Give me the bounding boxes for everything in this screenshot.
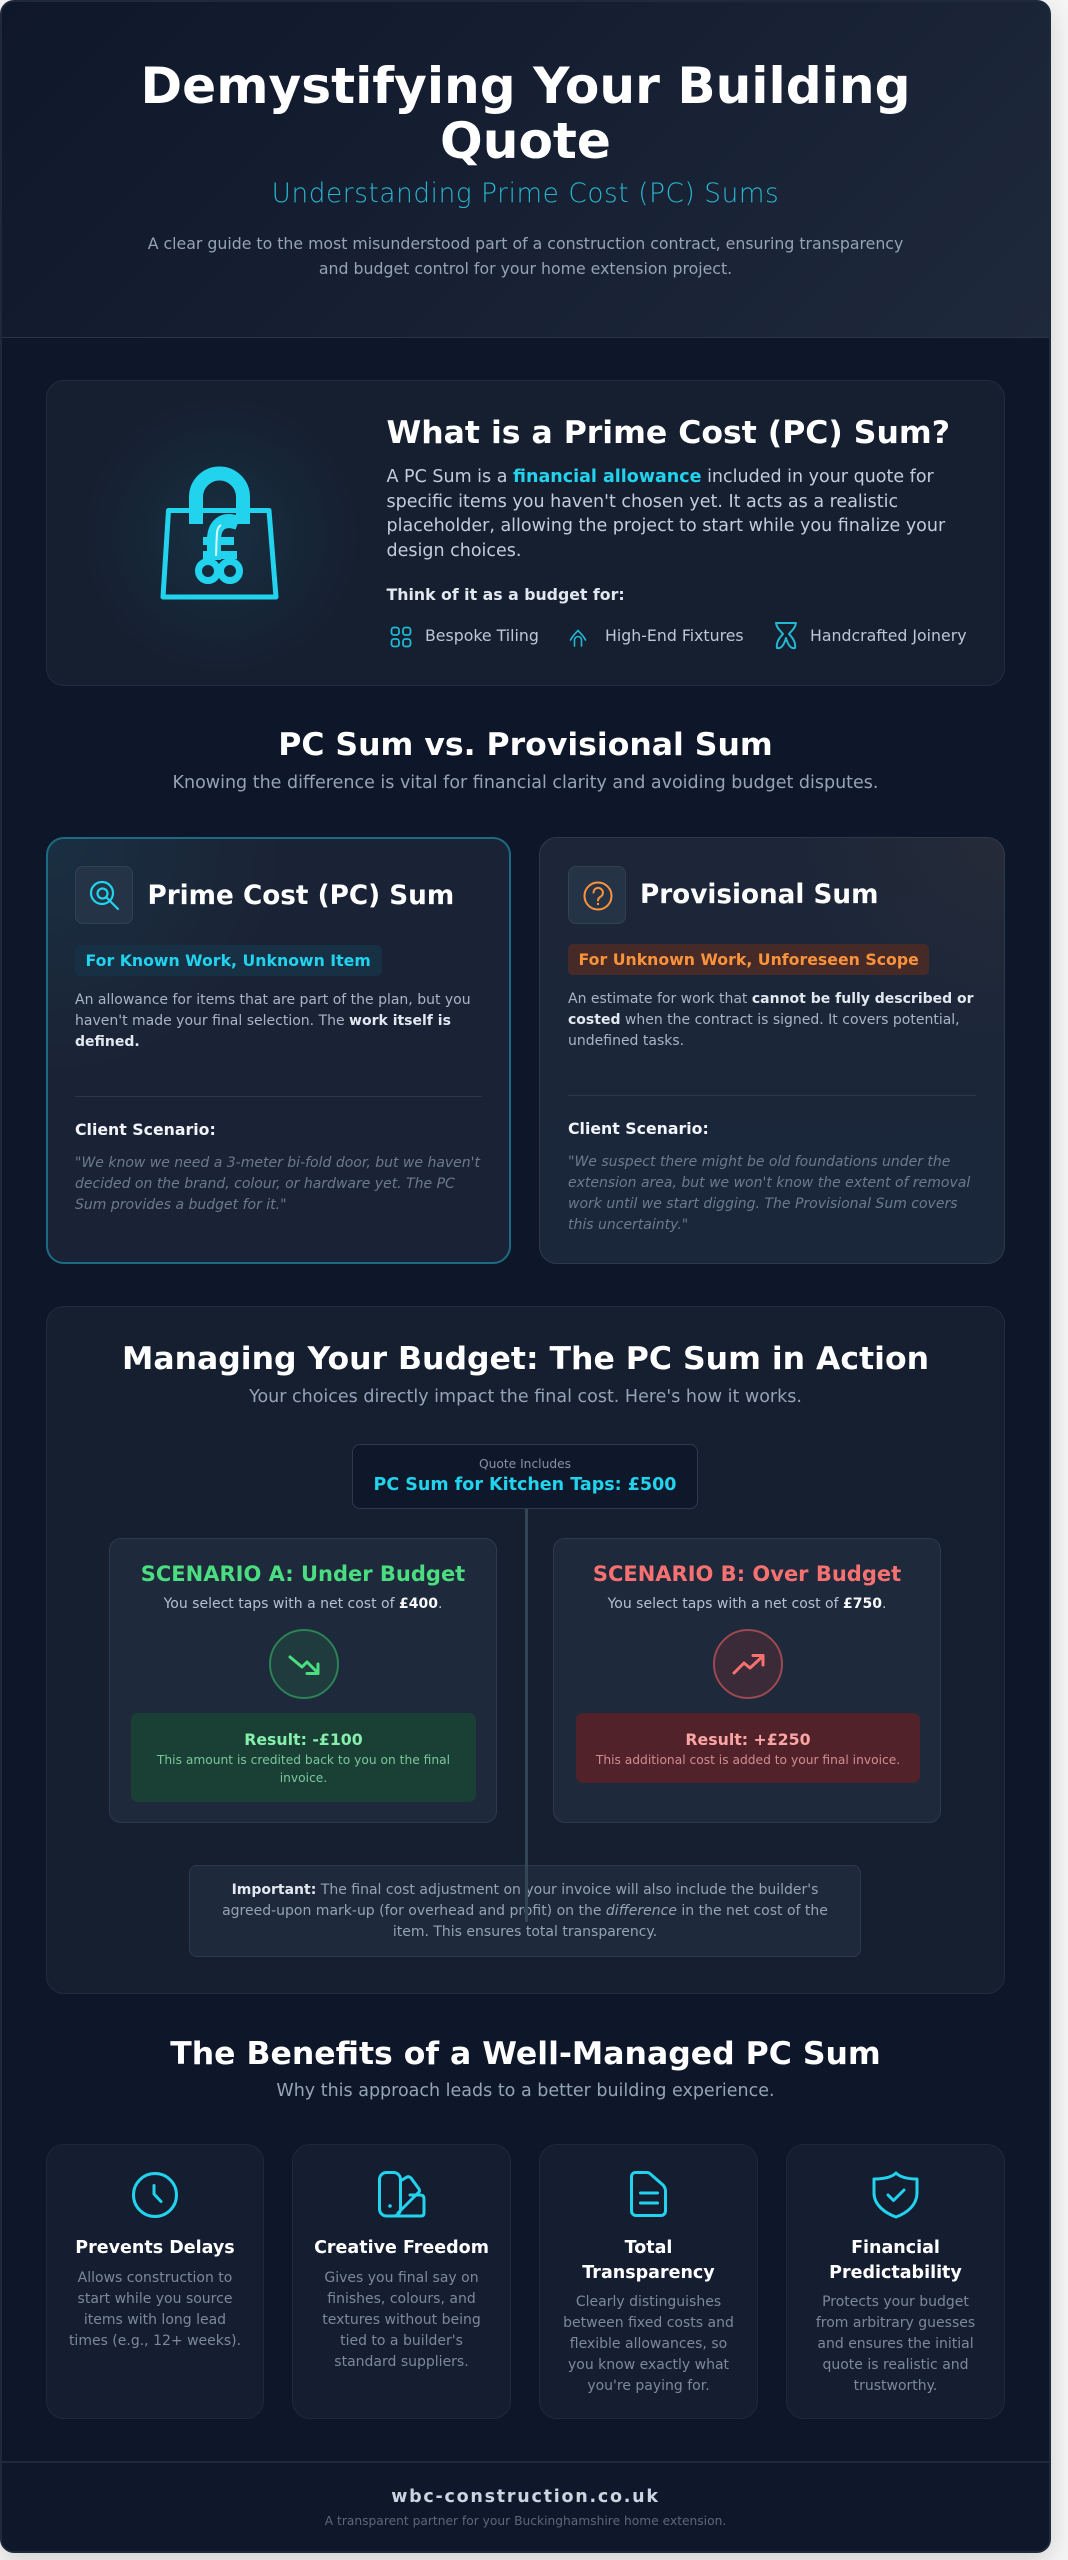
subheading: comparison: Knowing the difference is vital for financial clarity and avoiding budget disputes. <box>172 773 878 793</box>
tag: For Known Work, Unknown Item <box>86 951 371 970</box>
scenario quote: decided on the brand, colour, or hardware yet. The PC <box>75 1176 455 1192</box>
scenario A result <box>131 1713 476 1802</box>
icon: trending up <box>713 1629 783 1699</box>
scenario quote: this uncertainty." <box>568 1217 688 1233</box>
label: handcrafted joinery: Handcrafted Joinery <box>810 626 967 645</box>
description: flexible allowances, so <box>570 2336 727 2352</box>
benefit card: total transparency <box>539 2144 758 2419</box>
text: PC sum definition: placeholder, allowing the project to start while you finalize your <box>386 516 945 536</box>
note text <box>222 1882 828 1940</box>
tag <box>75 945 382 976</box>
footer tagline: A transparent partner for your Buckinghamshire home extension. <box>325 2514 726 2528</box>
scenario quote <box>568 1154 970 1233</box>
description: you're paying for. <box>587 2378 710 2394</box>
description <box>75 992 471 1050</box>
scenario heading: Client Scenario: <box>568 1119 709 1138</box>
description: items with long lead <box>84 2312 226 2328</box>
result text <box>156 1753 450 1784</box>
description: Clearly distinguishes <box>576 2294 721 2310</box>
description: An estimate for work that cannot be fully described or <box>568 991 974 1007</box>
description: defined. <box>75 1034 140 1050</box>
scenario B title: SCENARIO B: Over Budget <box>593 1562 901 1586</box>
title: Prevents Delays <box>75 2238 235 2258</box>
panel: scenario B <box>553 1538 941 1823</box>
description: costed when the contract is signed. It covers potential, <box>568 1012 960 1028</box>
note text: item. This ensures total transparency. <box>393 1924 657 1940</box>
result text: This amount is credited back to you on the final <box>157 1753 450 1767</box>
description: from arbitrary guesses <box>816 2315 975 2331</box>
tag: For Unknown Work, Unforeseen Scope <box>578 950 919 969</box>
description <box>69 2270 241 2349</box>
text: PC sum definition <box>386 467 946 560</box>
text: PC sum definition: specific items you haven't chosen yet. It acts as a realistic <box>386 492 898 512</box>
result text: This additional cost is added to your final invoice. <box>596 1753 900 1767</box>
scenario quote: "We suspect there might be old foundations under the <box>568 1154 950 1170</box>
subheading: benefits: Why this approach leads to a better building experience. <box>276 2081 775 2101</box>
description: between fixed costs and <box>563 2315 734 2331</box>
title <box>582 2238 715 2282</box>
title: Transparency <box>582 2262 715 2282</box>
panel: what is a PC sum <box>46 380 1005 686</box>
title: Creative Freedom <box>314 2238 489 2258</box>
scenario B result <box>576 1713 920 1783</box>
result heading: Result: +£250 <box>685 1730 811 1749</box>
title: Quote <box>440 111 611 170</box>
benefit card: prevents delays <box>46 2144 264 2419</box>
label: bespoke tiling: Bespoke Tiling <box>425 626 539 645</box>
title: Financial <box>851 2238 940 2258</box>
description: quote is realistic and <box>822 2357 969 2373</box>
description: tied to a builder's <box>340 2333 463 2349</box>
icon: trending down <box>269 1629 339 1699</box>
description: start while you source <box>78 2291 232 2307</box>
callout: important note <box>189 1865 861 1957</box>
divider <box>568 1095 976 1096</box>
icon: document <box>630 2171 667 2217</box>
description: and ensures the initial <box>817 2336 974 2352</box>
description <box>816 2294 975 2394</box>
heading: benefits: The Benefits of a Well-Managed PC Sum <box>170 2036 881 2072</box>
description: times (e.g., 12+ weeks). <box>69 2333 241 2349</box>
description <box>568 991 974 1049</box>
icon: swatches <box>378 2171 426 2218</box>
icon: clock <box>132 2172 178 2218</box>
header band <box>0 0 1051 338</box>
scenario quote: work until we start digging. The Provisional Sum covers <box>568 1196 958 1212</box>
panel: managing your budget <box>46 1306 1005 1994</box>
intro text <box>148 234 903 278</box>
description: textures without being <box>322 2312 481 2328</box>
quote value: PC Sum for Kitchen Taps: £500 <box>374 1475 676 1495</box>
description <box>322 2270 481 2370</box>
panel: scenario A <box>109 1538 497 1823</box>
icon box: question <box>568 866 626 924</box>
footer site: wbc-construction.co.uk <box>391 2487 660 2507</box>
description: Allows construction to <box>78 2270 232 2286</box>
quote box <box>352 1444 698 1509</box>
card title: Provisional Sum <box>640 880 878 910</box>
scenario B text: You select taps with a net cost of £750. <box>608 1596 886 1612</box>
scenario heading: Client Scenario: <box>75 1120 216 1139</box>
subtitle: Understanding Prime Cost (PC) Sums <box>272 179 779 209</box>
scenario quote: extension area, but we won't know the extent of removal <box>568 1175 970 1191</box>
description <box>563 2294 734 2394</box>
icon: bespoke tiling <box>390 626 412 648</box>
text: PC sum definition: design choices. <box>386 540 521 560</box>
description: standard suppliers. <box>334 2354 469 2370</box>
icon glow <box>81 395 361 675</box>
title: Demystifying Your Building <box>140 56 910 115</box>
scenario quote: "We know we need a 3-meter bi-fold door, but we haven't <box>75 1155 480 1171</box>
description: Protects your budget <box>822 2294 969 2310</box>
note text: agreed-upon mark-up (for overhead and profit) on the difference in the net cost of the <box>222 1903 828 1919</box>
text: budget intro: Think of it as a budget for: <box>386 585 625 604</box>
benefit card: creative freedom <box>292 2144 511 2419</box>
description: An allowance for items that are part of the plan, but you <box>75 992 471 1008</box>
result heading: Result: -£100 <box>244 1730 363 1749</box>
description: you know exactly what <box>568 2357 729 2373</box>
card title: Prime Cost (PC) Sum <box>148 881 454 911</box>
panel: provisional sum <box>539 837 1005 1264</box>
heading: comparison: PC Sum vs. Provisional Sum <box>278 727 773 763</box>
description: undefined tasks. <box>568 1033 684 1049</box>
scenario quote <box>75 1155 480 1213</box>
title: Predictability <box>829 2262 962 2282</box>
intro text: A clear guide to the most misunderstood part of a construction contract, ensuring transparency <box>148 234 903 253</box>
description: finishes, colours, and <box>327 2291 476 2307</box>
scenario A title: SCENARIO A: Under Budget <box>141 1562 465 1586</box>
subheading: managing budget: Your choices directly impact the final cost. Here's how it works. <box>249 1387 802 1407</box>
title <box>829 2238 962 2282</box>
heading: managing budget: Managing Your Budget: The PC Sum in Action <box>122 1341 929 1377</box>
heading: what is a PC sum: What is a Prime Cost (PC) Sum? <box>386 415 950 451</box>
description: trustworthy. <box>854 2378 937 2394</box>
icon box: search <box>75 866 133 924</box>
divider <box>75 1096 482 1097</box>
text: PC sum definition: A PC Sum is a financial allowance included in your quote for <box>386 467 934 487</box>
icon: pound lock bag <box>160 466 278 600</box>
icon: high-end fixtures <box>570 629 586 647</box>
scenario A text: You select taps with a net cost of £400. <box>164 1596 442 1612</box>
result text: invoice. <box>280 1770 327 1784</box>
tag <box>568 944 929 975</box>
panel: prime cost sum <box>46 837 511 1264</box>
benefit card: financial predictability <box>786 2144 1005 2419</box>
icon: shield check <box>872 2171 918 2218</box>
icon: handcrafted joinery <box>775 622 797 650</box>
description: haven't made your final selection. The work itself is <box>75 1013 451 1029</box>
description: Gives you final say on <box>324 2270 479 2286</box>
label: high-end fixtures: High-End Fixtures <box>605 626 744 645</box>
connector line <box>525 1509 528 1922</box>
footer <box>0 2461 1051 2553</box>
intro text: and budget control for your home extension project. <box>319 259 732 278</box>
quote label: Quote Includes <box>479 1457 571 1471</box>
note text: Important: The final cost adjustment on your invoice will also include the builder's <box>232 1882 818 1898</box>
scenario quote: Sum provides a budget for it." <box>75 1197 287 1213</box>
title <box>140 56 910 170</box>
title: Total <box>625 2238 672 2258</box>
